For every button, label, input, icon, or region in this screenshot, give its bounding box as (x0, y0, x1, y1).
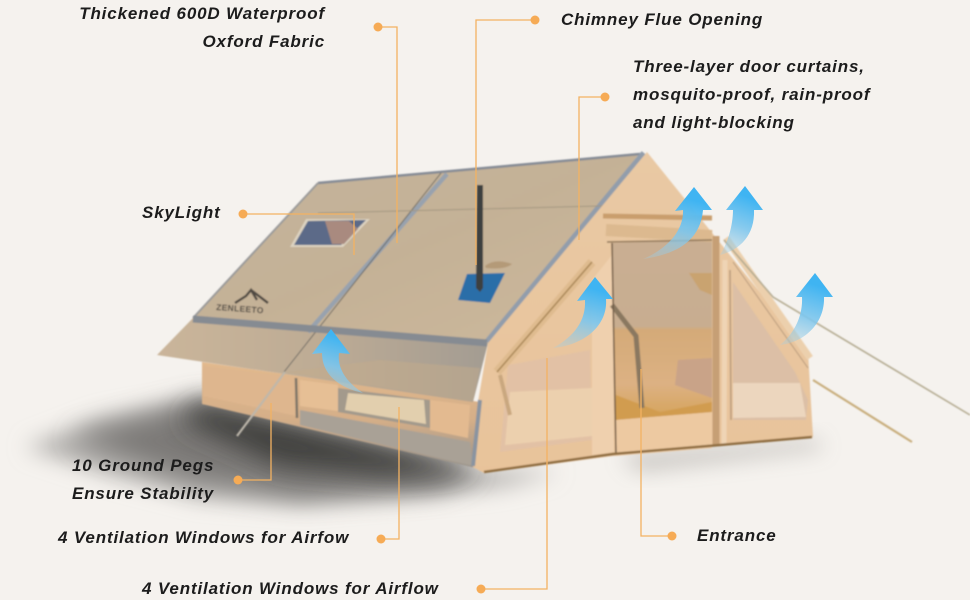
corner strap (473, 400, 480, 466)
arrow: awning vent (312, 329, 363, 393)
side wall with windows (202, 362, 480, 468)
roof panel (193, 153, 640, 343)
callout: skylight: SkyLight (142, 203, 221, 222)
callout: ground pegs: 10 Ground Pegs (72, 456, 214, 475)
callout: door curtains: and light-blocking (633, 113, 795, 132)
callout: door curtains (579, 57, 872, 240)
arrow: right side vent (780, 273, 833, 345)
callout: door curtains: mosquito-proof, rain-proof (633, 85, 872, 104)
callout: front ventilation (141, 358, 547, 598)
ridge tube (318, 154, 640, 183)
callout: fabric: Thickened 600D Waterproof (79, 4, 326, 23)
roof edge tubes (193, 183, 318, 318)
tent (157, 152, 970, 473)
callout: fabric: Oxford Fabric (202, 32, 325, 51)
callout: entrance (641, 369, 777, 545)
arrow: door left vent (553, 277, 613, 348)
arrow: top door vent (643, 187, 712, 259)
guy line on roof (318, 205, 640, 213)
callout: side ventilation: 4 Ventilation Windows for Airfow (57, 528, 350, 547)
door opening (612, 240, 712, 420)
logo mark (216, 290, 268, 315)
tent hem (484, 437, 812, 472)
guy lines (237, 240, 970, 442)
callout: chimney: Chimney Flue Opening (561, 10, 763, 29)
logo mark: ZENLEETO (216, 302, 264, 315)
callout: ground pegs: Ensure Stability (72, 484, 215, 503)
callout: door curtains: Three-layer door curtains, (633, 57, 865, 76)
skylight (290, 219, 370, 247)
chimney flue (458, 185, 512, 303)
ground shadow (25, 398, 825, 505)
callout: front ventilation: 4 Ventilation Windows for Airflow (141, 579, 440, 598)
callout: fabric (79, 4, 397, 243)
callout: entrance: Entrance (697, 526, 777, 545)
callout: ground pegs (72, 403, 271, 503)
callout: chimney (476, 10, 763, 265)
arrow: top right vent (720, 186, 763, 255)
callout: side ventilation (57, 407, 399, 547)
front gable (473, 152, 813, 473)
awning flap (157, 318, 488, 402)
callout: skylight (142, 203, 354, 255)
door frame (603, 216, 731, 455)
inflatable tubes (497, 262, 592, 372)
